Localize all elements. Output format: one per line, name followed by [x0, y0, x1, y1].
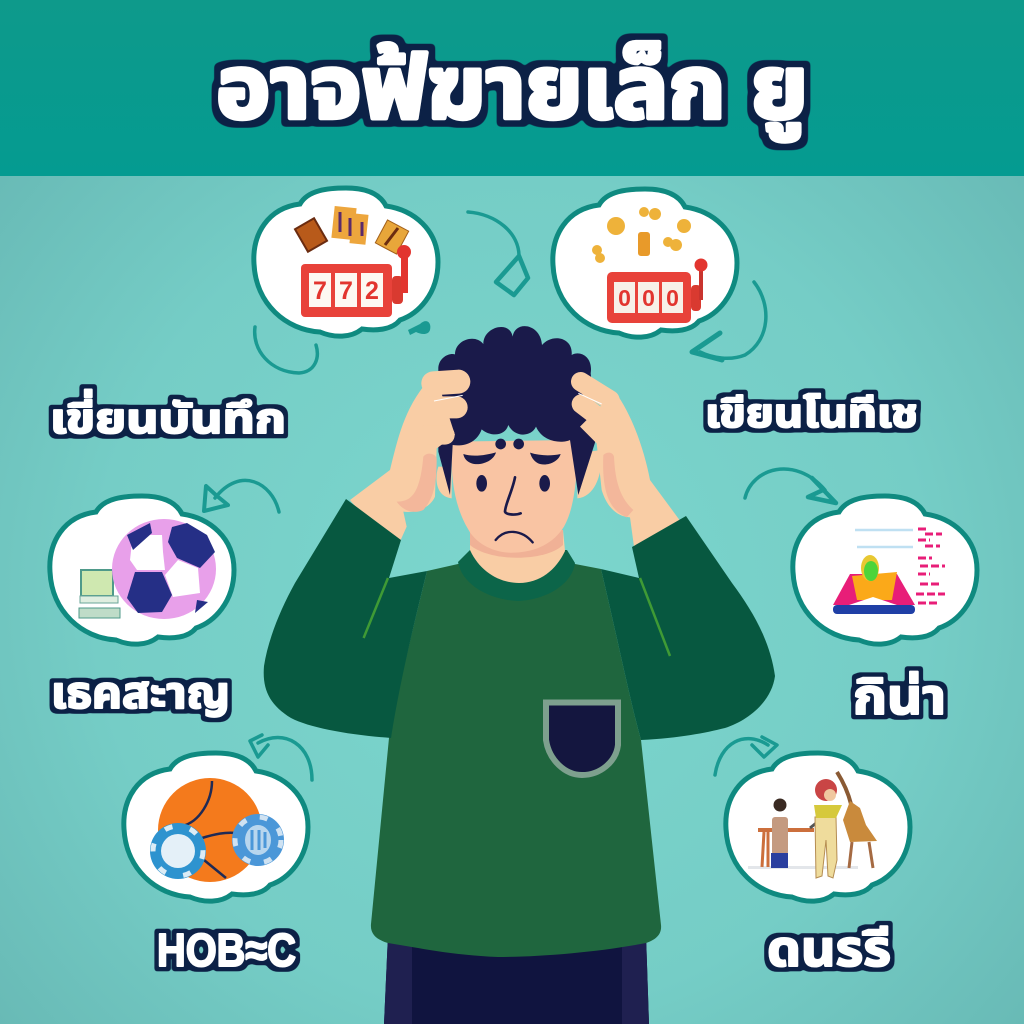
thought bubble: slot machine 000 [553, 189, 737, 337]
label: top left: เขี่ยนบันทึก [50, 389, 286, 442]
arrow: top left [255, 327, 317, 373]
label: bottom right: ดนรรี [767, 921, 891, 977]
label: middle left: เธคสะาญ [51, 669, 230, 718]
icon: slot machine: 0 [666, 285, 679, 311]
thought bubble: slot machine 772 [254, 188, 438, 336]
icon: slot machine: 0 [642, 285, 655, 311]
icon: coins [592, 207, 691, 263]
icon: slot machine [301, 245, 411, 317]
icon: cards [295, 206, 409, 254]
title: อาจฟ้ฆายเล็ก ยู [216, 38, 808, 142]
face [451, 440, 577, 553]
icon: poker chip right [232, 814, 284, 866]
icon: slot machine: 7 [313, 277, 327, 305]
thought bubble: basketball and chips [124, 753, 308, 901]
label: middle right: กิน่า [853, 669, 946, 725]
arrow: right lower [715, 737, 777, 775]
icon: slot machine [607, 258, 708, 323]
thought bubble: reading figure [793, 496, 977, 644]
icon: slot machine: 2 [365, 277, 379, 305]
icon: basketball [158, 778, 262, 882]
nose [505, 477, 521, 515]
icon: soccer ball [112, 519, 216, 619]
icon: computer [79, 570, 120, 618]
chin shadow [470, 530, 563, 558]
right hand [578, 382, 682, 547]
sleeve highlights [364, 578, 670, 656]
mouth [496, 532, 533, 542]
forehead marks [495, 439, 524, 449]
icon: slot machine: 7 [339, 277, 353, 305]
header band [0, 0, 1024, 176]
arrow: right middle [745, 469, 836, 503]
pocket [546, 702, 618, 775]
thought bubble: music scene [726, 753, 910, 901]
label: bottom left: HOB≈C [157, 924, 296, 976]
ears [436, 450, 601, 498]
arrow: left lower [250, 735, 312, 780]
arrow: top centre [468, 212, 528, 295]
icon: music scene [748, 772, 877, 878]
thought bubble: soccer ball and computer [50, 496, 234, 644]
neck [470, 530, 565, 583]
eyes [476, 475, 550, 492]
collar [458, 550, 575, 601]
eyebrows [463, 452, 561, 464]
head and hands [350, 326, 682, 553]
hair [438, 326, 597, 495]
arrow: left middle [204, 480, 279, 512]
icon: slot machine: 0 [618, 285, 631, 311]
person [264, 326, 775, 1024]
pants [384, 935, 649, 1024]
left hand [350, 373, 463, 540]
arrow: top right [692, 282, 766, 360]
left sleeve [264, 499, 427, 738]
icon: poker chip left [150, 823, 206, 879]
arrow blot near first cloud [408, 321, 430, 335]
sweater body [371, 564, 661, 957]
right sleeve [601, 516, 775, 740]
icon: reader and book [833, 529, 945, 614]
label: top right: เขียนโนทีเช [705, 392, 918, 436]
